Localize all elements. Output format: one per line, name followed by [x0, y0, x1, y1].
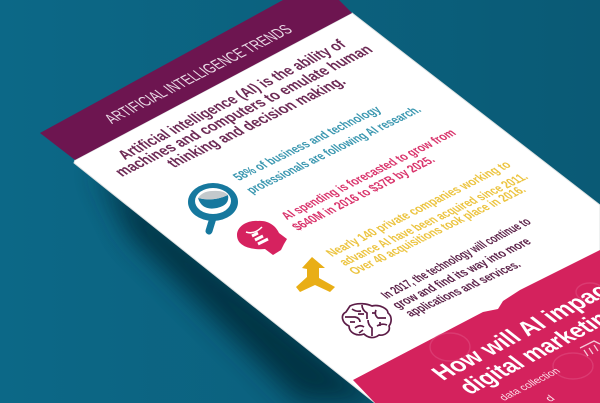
- intro text: machines and computers to emulate human: [110, 42, 377, 179]
- icon: head with chart: [237, 221, 287, 255]
- stat: research text: 58% of business and technology: [230, 103, 385, 183]
- icon: chart outline: [580, 341, 600, 356]
- stat: research text: [230, 103, 424, 196]
- intro text: Artificial intelligence (AI) is the ability of: [113, 36, 350, 162]
- paper shadow: [95, 165, 385, 403]
- icon: brain: [342, 304, 391, 338]
- icon: magnifying glass: [188, 183, 238, 231]
- panel: pink section: [353, 250, 600, 403]
- stat: research text: professionals are following AI research.: [243, 104, 424, 196]
- stat: acquisitions text: Nearly 140 private companies working to: [323, 159, 514, 259]
- gear decoration: [430, 283, 600, 379]
- intro text: thinking and decision making.: [162, 74, 350, 170]
- stat: acquisitions text: Over 40 acquisitions took place in 2016.: [346, 184, 529, 277]
- stat: outlook text: grow and find its way into more: [389, 235, 535, 311]
- stat: acquisitions text: [323, 159, 531, 277]
- section body text: data collection: [497, 366, 563, 403]
- panel: header band: [40, 0, 352, 160]
- icon: merging arrows: [296, 257, 335, 292]
- stat: spending text: AI spending is forecasted to grow from: [278, 127, 459, 222]
- stat: acquisitions text: advance AI have been acquired since 2011.: [336, 171, 531, 268]
- stat: outlook text: applications and services.: [402, 259, 524, 319]
- stat: spending text: $640M in 2016 to $37B by 2025.: [289, 154, 438, 233]
- stat: outlook text: [378, 216, 535, 319]
